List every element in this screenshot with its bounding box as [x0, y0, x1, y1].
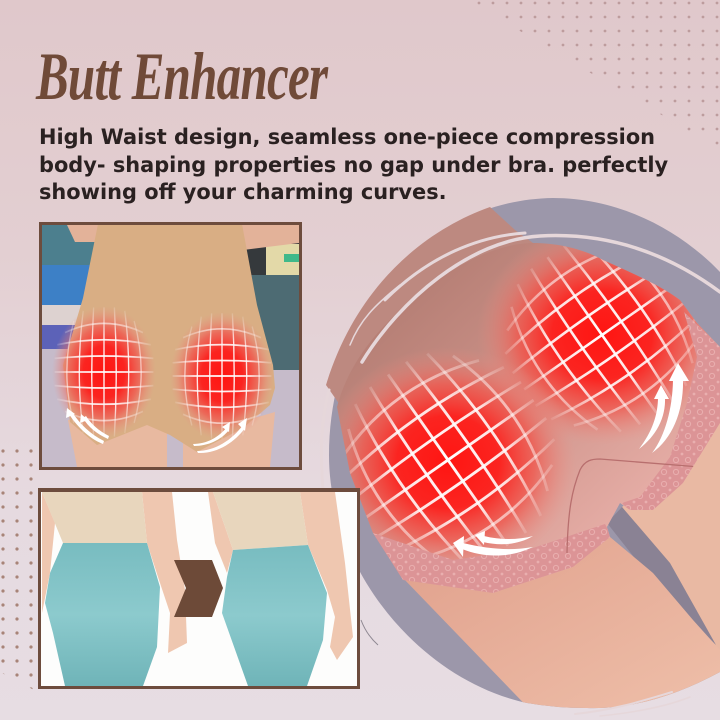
description text: body- shaping properties no gap under bra. perfectly — [39, 152, 668, 176]
front thigh — [403, 537, 720, 720]
heat zone: right — [486, 244, 713, 434]
bodysuit — [63, 224, 275, 452]
dot pattern: lower left — [0, 448, 38, 690]
icon: chevron arrow — [174, 560, 223, 617]
title: Butt Enhancer — [36, 38, 327, 114]
photo panel: before and after — [38, 488, 360, 689]
ring strokes — [321, 233, 720, 716]
shadow sheet — [607, 507, 716, 645]
thin stroke lower — [361, 620, 378, 645]
lace lower — [373, 524, 612, 593]
dot pattern: top right — [468, 0, 720, 150]
description text: showing off your charming curves. — [39, 180, 447, 204]
arrows — [453, 363, 689, 557]
lace right — [622, 312, 720, 512]
garment — [337, 243, 720, 593]
main photo — [302, 190, 720, 720]
description text: High Waist design, seamless one-piece compression — [39, 125, 655, 149]
seam — [567, 459, 700, 553]
description text — [39, 125, 668, 204]
background — [42, 349, 299, 467]
after figure — [208, 492, 353, 686]
legs — [68, 410, 275, 467]
waist band brush area — [326, 207, 533, 405]
heat zone: left small — [52, 306, 156, 438]
arrows small — [66, 408, 247, 453]
photo panel: top left — [39, 222, 302, 470]
grey backdrop — [320, 190, 720, 720]
heat zone: right small — [170, 312, 274, 440]
arms — [67, 225, 100, 242]
right thigh — [622, 420, 720, 660]
before figure — [42, 492, 187, 686]
heat zone: left — [340, 353, 564, 560]
